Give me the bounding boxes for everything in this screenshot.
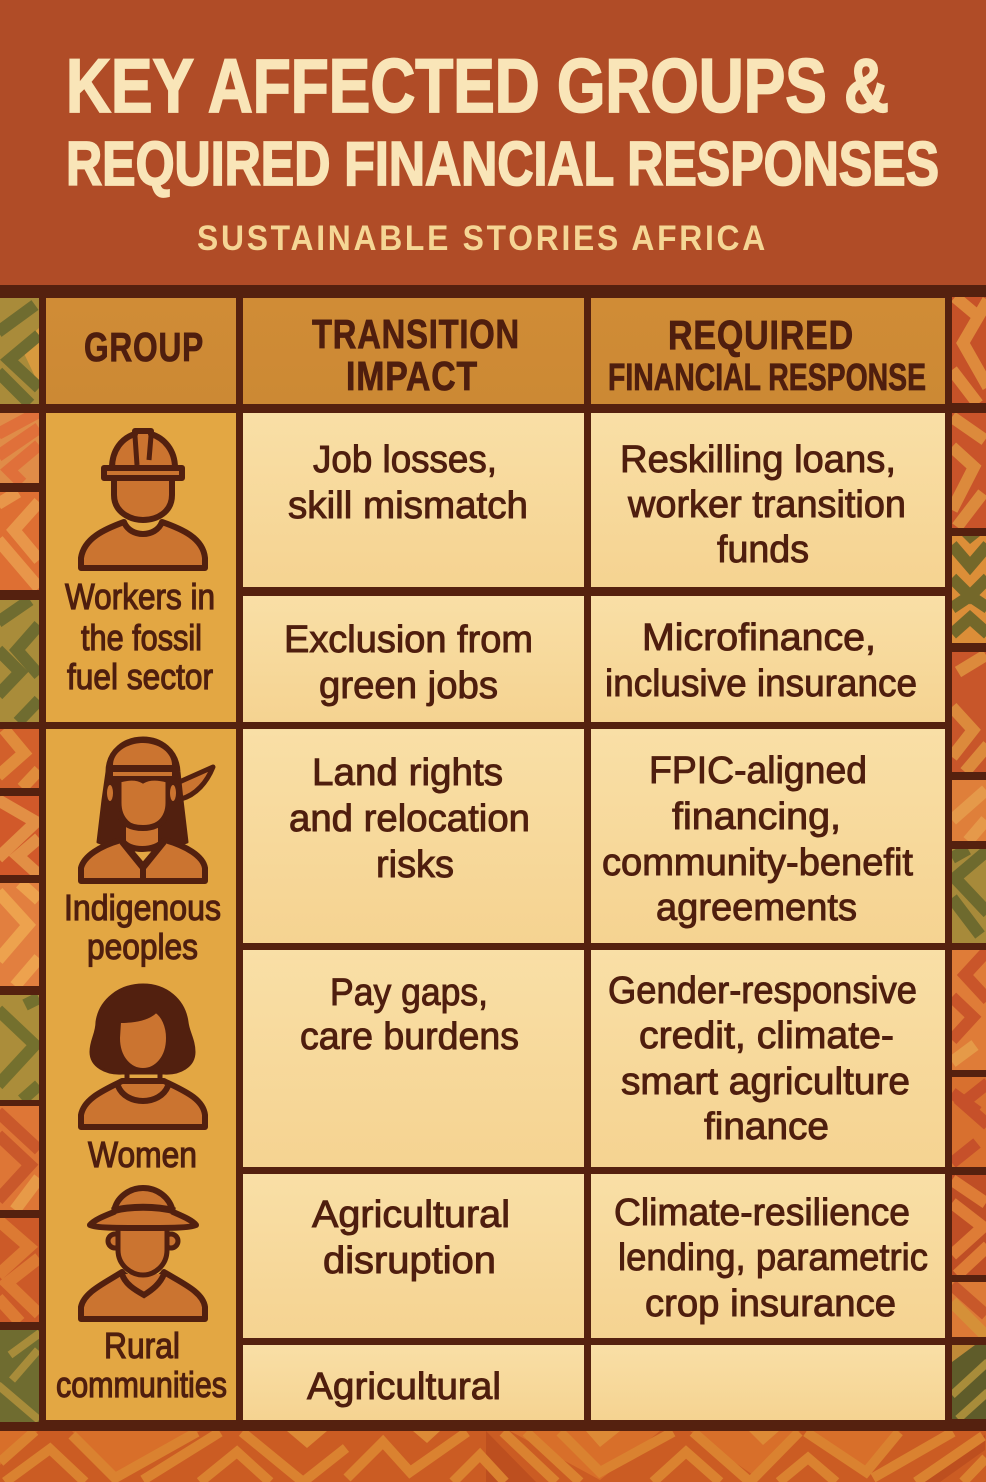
impact: row 2: green jobs bbox=[319, 665, 498, 707]
response: row 2 bbox=[591, 596, 945, 722]
label bbox=[56, 1325, 227, 1405]
group cell: workers in the fossil fuel sector bbox=[46, 413, 236, 722]
response: row 3: FPIC-aligned bbox=[649, 750, 867, 792]
impact: row 3: Land rights bbox=[312, 752, 503, 794]
group cell: indigenous, women, rural bbox=[46, 729, 236, 1420]
response: row 3 bbox=[591, 729, 945, 943]
icon: rural person with hat bbox=[81, 1188, 205, 1319]
impact: row 1: skill mismatch bbox=[288, 485, 528, 527]
panel: header banner bbox=[0, 0, 986, 285]
response: row 4: finance bbox=[704, 1106, 829, 1148]
response: row 5 bbox=[591, 1174, 945, 1338]
right decorative border bbox=[952, 297, 986, 1419]
impact: row 2: Exclusion from bbox=[284, 619, 533, 661]
response: row 6 (empty) bbox=[591, 1345, 945, 1420]
impact: row 2 bbox=[243, 596, 584, 722]
label bbox=[64, 887, 221, 967]
response: row 5: lending, parametric bbox=[618, 1237, 928, 1279]
column heading: group bbox=[46, 298, 236, 404]
impact: row 6: Agricultural bbox=[307, 1366, 501, 1408]
response: row 4 bbox=[591, 950, 945, 1167]
label: Indigenous bbox=[64, 887, 221, 928]
column heading: required financial response bbox=[591, 298, 945, 404]
response: row 4: Gender-responsive bbox=[608, 970, 917, 1012]
impact: row 3 bbox=[243, 729, 584, 943]
label bbox=[65, 576, 215, 697]
impact: row 5: disruption bbox=[323, 1240, 496, 1282]
title bbox=[66, 44, 939, 199]
impact: row 4: care burdens bbox=[300, 1016, 519, 1058]
response: row 5: crop insurance bbox=[645, 1283, 896, 1325]
icon: woman bbox=[81, 985, 205, 1127]
label: the fossil bbox=[81, 617, 202, 658]
column heading: transition impact: IMPACT bbox=[346, 353, 478, 399]
response: row 4: credit, climate- bbox=[639, 1015, 894, 1057]
response: row 2: Microfinance, bbox=[642, 617, 876, 659]
impact: row 4 bbox=[243, 950, 584, 1167]
label: peoples bbox=[87, 926, 198, 967]
left decorative border bbox=[0, 298, 40, 1422]
column heading: transition impact bbox=[243, 298, 584, 404]
impact: row 5: Agricultural bbox=[312, 1194, 510, 1236]
response: row 1: funds bbox=[717, 529, 809, 571]
response: row 5: Climate-resilience bbox=[614, 1192, 910, 1234]
bottom decorative border bbox=[0, 1431, 986, 1482]
impact: row 1 bbox=[243, 413, 584, 587]
response: row 1: worker transition bbox=[627, 484, 906, 526]
impact: row 5 bbox=[243, 1174, 584, 1338]
response: row 3: financing, bbox=[672, 796, 841, 838]
subtitle: SUSTAINABLE STORIES AFRICA bbox=[197, 219, 768, 258]
response: row 1 bbox=[591, 413, 945, 587]
column heading: transition impact: TRANSITION bbox=[312, 311, 520, 357]
impact: row 4: Pay gaps, bbox=[330, 972, 488, 1014]
icon: worker with hard hat bbox=[81, 431, 205, 568]
table header row bbox=[46, 298, 945, 404]
response: row 1: Reskilling loans, bbox=[620, 439, 896, 481]
impact: row 1: Job losses, bbox=[313, 439, 497, 481]
icon: indigenous person bbox=[81, 738, 213, 881]
impact: row 3: risks bbox=[376, 844, 454, 886]
column heading: required financial response: REQUIRED bbox=[668, 312, 854, 358]
label: communities bbox=[56, 1364, 227, 1405]
response: row 2: inclusive insurance bbox=[605, 663, 917, 705]
response: row 4: smart agriculture bbox=[621, 1061, 910, 1103]
impact: row 6 bbox=[243, 1345, 584, 1420]
label: Rural bbox=[104, 1325, 180, 1366]
column heading: group: GROUP bbox=[84, 324, 204, 370]
response: row 3: agreements bbox=[656, 887, 857, 929]
label: fuel sector bbox=[67, 656, 213, 697]
label: Workers in bbox=[65, 576, 215, 617]
response: row 3: community-benefit bbox=[602, 842, 913, 884]
label: Women bbox=[88, 1134, 197, 1175]
impact: row 3: and relocation bbox=[289, 798, 530, 840]
